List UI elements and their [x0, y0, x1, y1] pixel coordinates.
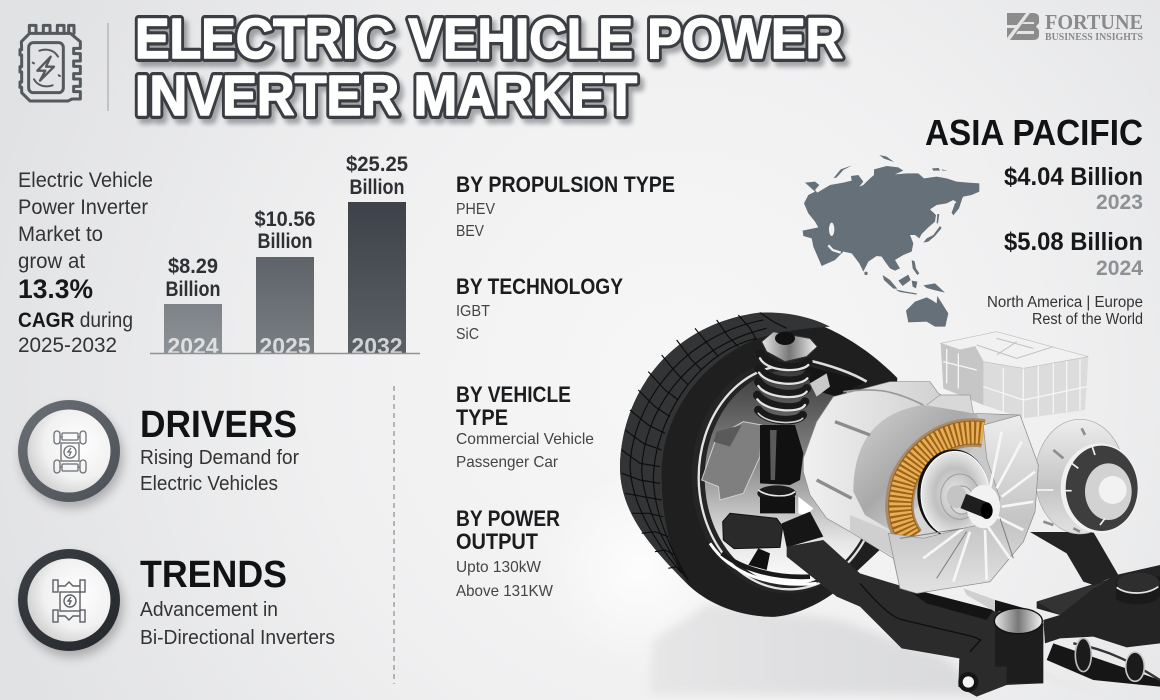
motor group — [803, 332, 1139, 593]
segment: by power output: Above 131KW — [456, 583, 554, 600]
inverter box — [941, 332, 1088, 418]
CAGR summary text: grow at — [18, 250, 85, 273]
icon: drivers button — [18, 400, 120, 502]
bar chart: market size: Billion — [258, 230, 312, 253]
title: INVERTER MARKET — [139, 69, 641, 133]
icon: trends button — [18, 549, 120, 651]
Asia Pacific stats: 2023 — [1096, 191, 1143, 214]
tire and wheel — [620, 313, 897, 617]
illustration: wheel, suspension and electric motor — [620, 313, 1160, 697]
motor housing — [803, 382, 1038, 593]
segment: by power output: BY POWER — [456, 506, 560, 531]
title: ELECTRIC VEHICLE POWER — [135, 7, 843, 71]
segment: by propulsion type: BEV — [456, 223, 484, 240]
segment: by vehicle type — [456, 382, 594, 471]
bar chart: market size: $8.29 — [168, 255, 218, 278]
logo: Fortune Business Insights — [1007, 10, 1143, 43]
title: ELECTRIC VEHICLE POWER — [139, 12, 847, 76]
bar chart: market size: $10.56 — [254, 208, 316, 231]
axle arm and brackets — [787, 532, 1160, 697]
CAGR summary text: Electric Vehicle — [18, 169, 153, 192]
bar chart: market size: Billion — [350, 176, 404, 199]
segment: by technology: SiC — [456, 326, 479, 343]
trends text: Bi-Directional Inverters — [140, 627, 335, 649]
Asia Pacific stats: $5.08 Billion — [1004, 228, 1143, 256]
bar chart: market size: 2025 — [259, 333, 311, 359]
segment: by propulsion type — [456, 172, 675, 240]
Asia Pacific stats — [925, 112, 1143, 328]
Asia Pacific stats: 2024 — [1096, 257, 1143, 280]
segment: by technology — [456, 274, 623, 343]
segment: by vehicle type: TYPE — [456, 405, 508, 430]
segment: by propulsion type: PHEV — [456, 201, 495, 218]
drivers text: Rising Demand for — [140, 447, 299, 469]
bar chart: market size: $25.25 — [346, 153, 408, 176]
stator copper winding — [899, 433, 983, 538]
CAGR summary text: Market to — [18, 223, 103, 246]
drivers text: Electric Vehicles — [140, 473, 278, 495]
suspension strut and spring — [757, 332, 817, 513]
rotor disc — [917, 449, 989, 537]
segment: by technology: IGBT — [456, 303, 490, 320]
segment: by vehicle type: Passenger Car — [456, 454, 559, 471]
trends text: Advancement in — [140, 599, 278, 621]
front bell with ribs — [888, 415, 1038, 593]
segment: by power output — [456, 506, 560, 600]
Asia Pacific stats: ASIA PACIFIC — [925, 112, 1143, 153]
Asia Pacific stats: North America | Europe — [987, 294, 1143, 311]
logo: Fortune Business Insights: BUSINESS INSIGHTS — [1045, 32, 1143, 43]
bar chart: market size: Billion — [166, 278, 220, 301]
title: INVERTER MARKET — [135, 64, 637, 128]
segment: by technology: BY TECHNOLOGY — [456, 274, 623, 299]
CAGR summary text: 2025-2032 — [18, 334, 117, 357]
Asia Pacific stats: $4.04 Billion — [1004, 163, 1143, 191]
CAGR summary text: 13.3% — [18, 274, 93, 304]
segment: by propulsion type: BY PROPULSION TYPE — [456, 172, 675, 197]
segment: by vehicle type: Commercial Vehicle — [456, 431, 594, 448]
bar chart: market size: 2032 — [351, 333, 403, 359]
rear motor — [1035, 419, 1139, 534]
segment: by vehicle type: BY VEHICLE — [456, 382, 571, 407]
title: INVERTER MARKET — [135, 64, 637, 128]
Asia Pacific stats: Rest of the World — [1032, 311, 1143, 328]
drivers text: DRIVERS — [140, 404, 297, 446]
segment: by power output: OUTPUT — [456, 529, 538, 554]
segment: by power output: Upto 130kW — [456, 559, 542, 576]
trends text: TRENDS — [140, 554, 287, 596]
title — [135, 7, 847, 133]
wheel rim — [692, 360, 882, 593]
bar chart: market size — [150, 153, 420, 359]
CAGR summary text — [18, 169, 153, 357]
CAGR summary text: CAGR during — [18, 309, 133, 332]
trends text — [140, 554, 335, 649]
CAGR summary text: Power Inverter — [18, 196, 148, 219]
title: ELECTRIC VEHICLE POWER — [135, 7, 843, 71]
map: Asia Pacific — [803, 155, 979, 327]
drivers text — [140, 404, 299, 495]
knuckle bracket — [723, 512, 823, 549]
bar chart: market size: 2024 — [167, 333, 219, 359]
icon: inverter chip — [20, 25, 80, 101]
logo: Fortune Business Insights: FORTUNE — [1045, 10, 1143, 34]
